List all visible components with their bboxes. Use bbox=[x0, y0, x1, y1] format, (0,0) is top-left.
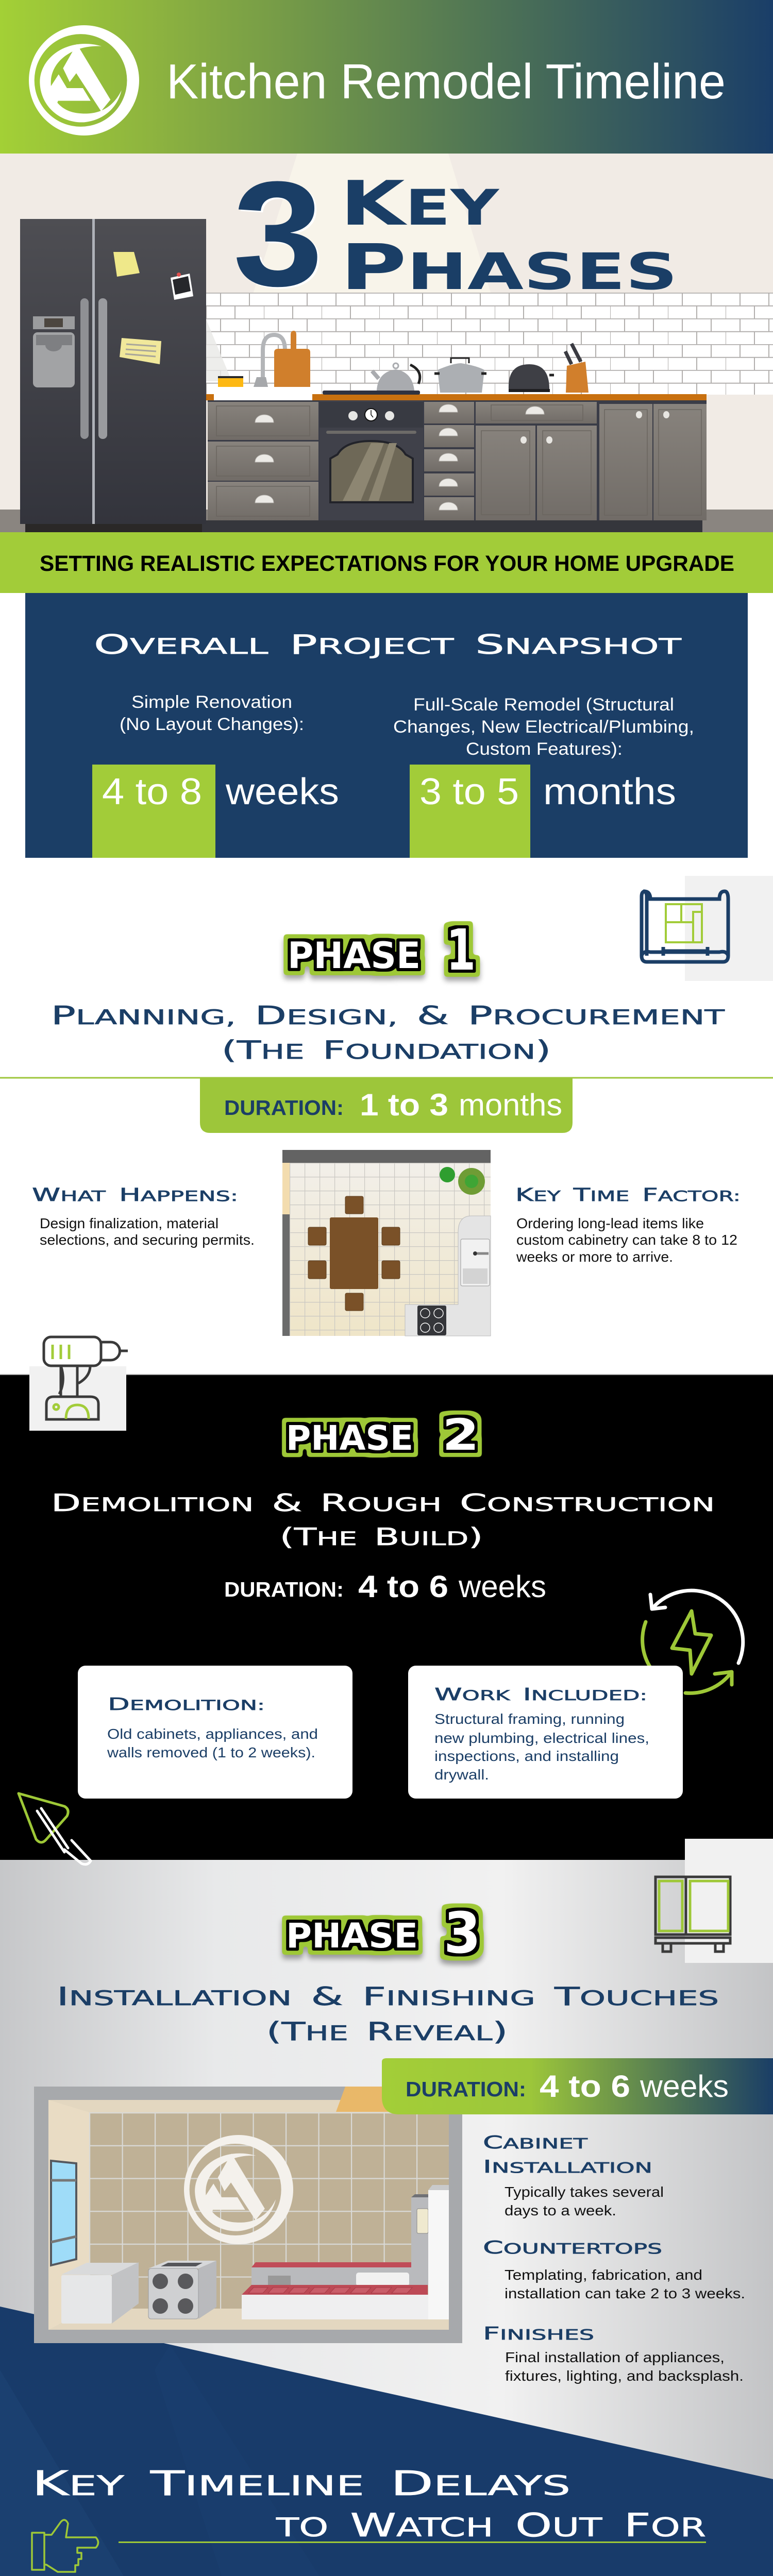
heading: installation: INSTALLATION & F INISHING T OUCHES bbox=[57, 1982, 719, 2011]
icon: cabinets bbox=[208, 400, 707, 520]
text: full-scale remodel bbox=[393, 695, 694, 759]
icon: A-1 logo bbox=[29, 25, 139, 135]
callout: phase 1 duration: months bbox=[459, 1088, 562, 1122]
badge: phase 1: PHASE bbox=[288, 935, 421, 977]
illustration: kitchen floor plan bbox=[282, 1150, 491, 1336]
text: full-scale remodel: Full-Scale Remodel (Structural bbox=[413, 695, 674, 715]
heading: planning bbox=[51, 1001, 726, 1065]
panel: phase 3 background bbox=[0, 1860, 773, 2483]
text: cabinet installation bbox=[483, 2132, 664, 2218]
icon: blueprint bbox=[642, 891, 728, 962]
heading: demolition: (T HE B UILD ) bbox=[280, 1523, 483, 1551]
text: key time factor bbox=[515, 1185, 741, 1265]
text: countertops bbox=[483, 2238, 745, 2301]
heading: 3 Key Phases: P HASES bbox=[340, 231, 678, 304]
text: cabinet installation: C ABINET bbox=[483, 2132, 588, 2153]
heading: installation: (T HE R EVEAL ) bbox=[266, 2017, 508, 2046]
text: key time factor: Ordering long-lead items like bbox=[516, 1215, 704, 1231]
heading: planning: (T HE F OUNDATION ) bbox=[222, 1036, 551, 1065]
text: countertops: Templating, fabrication, and bbox=[505, 2267, 702, 2283]
badge: phase 3: 3 bbox=[444, 1900, 481, 1966]
callout: phase 2 duration: weeks bbox=[458, 1569, 546, 1604]
callout: phase 1 duration: DURATION: bbox=[224, 1096, 344, 1120]
heading: demolition: D EMOLITION & R OUGH C ONSTRUCTION bbox=[51, 1489, 715, 1517]
icon: drill bbox=[44, 1337, 128, 1419]
card: work included: inspections, and installing bbox=[434, 1748, 619, 1764]
text: finishes: Final installation of appliances, bbox=[505, 2349, 725, 2365]
icon: logo watermark bbox=[184, 2135, 293, 2244]
stat: 4 to 8 weeks: weeks bbox=[225, 771, 339, 812]
heading: key timeline delays bbox=[32, 2464, 706, 2544]
callout: phase 3 duration: weeks bbox=[640, 2069, 729, 2104]
heading: snapshot: O VERALL P ROJECT S NAPSHOT bbox=[94, 630, 682, 660]
badge: phase 3 bbox=[286, 1900, 481, 1966]
card: demolition: Old cabinets, appliances, and bbox=[107, 1726, 318, 1742]
panel: hero kitchen illustration bbox=[0, 150, 773, 532]
heading: demolition bbox=[51, 1489, 715, 1551]
card: demolition: D EMOLITION: bbox=[108, 1694, 265, 1714]
illustration: finished kitchen room bbox=[34, 2087, 462, 2343]
icon: pointing hand bbox=[32, 2520, 98, 2572]
callout: phase 3 duration: 4 to 6 bbox=[540, 2069, 630, 2104]
stat: 3 to 5 months: months bbox=[543, 771, 676, 812]
card: demolition bbox=[78, 1666, 352, 1799]
panel: navy delays background bbox=[0, 2307, 773, 2576]
stat: 4 to 8 weeks: 4 to 8 bbox=[102, 771, 202, 812]
callout: phase 2 duration: DURATION: bbox=[224, 1578, 344, 1601]
text: what happens: selections, and securing permits. bbox=[40, 1232, 255, 1248]
stat: 4 to 8 weeks bbox=[92, 765, 339, 858]
text: key time factor: custom cabinetry can take 8 to 12 bbox=[516, 1232, 737, 1248]
card: work included: drywall. bbox=[434, 1767, 489, 1783]
text: finishes: F INISHES bbox=[483, 2324, 594, 2344]
panel: phase 3 content bbox=[57, 1877, 730, 2046]
callout: phase 1 duration: 1 to 3 bbox=[360, 1088, 448, 1122]
text: simple renovation: Simple Renovation bbox=[131, 692, 292, 712]
text: key time factor: K EY T IME F ACTOR: bbox=[515, 1185, 741, 1206]
text: countertops: installation can take 2 to 3 weeks. bbox=[505, 2285, 745, 2301]
panel: key timeline delays bbox=[32, 2464, 771, 2576]
panel: phase 2 bbox=[0, 1337, 773, 1860]
text: finishes: fixtures, lighting, and backsplash. bbox=[505, 2368, 744, 2384]
card: work included: new plumbing, electrical lines, bbox=[434, 1730, 649, 1746]
callout: phase 3 duration bbox=[382, 2058, 773, 2114]
callout: phase 3 duration: DURATION: bbox=[406, 2077, 526, 2101]
badge: phase 3: PHASE bbox=[286, 1916, 418, 1956]
badge: phase 2 bbox=[286, 1410, 479, 1460]
icon: lightning cycle bbox=[643, 1590, 743, 1693]
icon: sink, faucet, board and sponge bbox=[206, 331, 707, 400]
stat: 3 to 5 months: 3 to 5 bbox=[419, 771, 519, 812]
callout: phase 2 duration bbox=[224, 1569, 546, 1604]
heading: key timeline delays: TO W ATCH O UT F OR bbox=[276, 2506, 706, 2544]
banner: tagline bbox=[0, 532, 773, 593]
panel: header banner bbox=[0, 0, 773, 154]
text: simple renovation bbox=[120, 692, 304, 734]
text: what happens bbox=[32, 1185, 255, 1248]
text: full-scale remodel: Custom Features): bbox=[466, 739, 623, 759]
icon: stovetop kettle pot toaster and knives bbox=[323, 344, 589, 395]
icon: trowel bbox=[19, 1793, 91, 1865]
text: cabinet installation: days to a week. bbox=[505, 2202, 616, 2218]
banner: tagline: SETTING REALISTIC EXPECTATIONS FOR YOUR HOME UPGRADE bbox=[40, 551, 734, 576]
badge: phase 1: 1 bbox=[446, 917, 476, 983]
text: finishes bbox=[483, 2324, 744, 2384]
badge: phase 1 bbox=[288, 917, 476, 983]
badge: phase 2: PHASE bbox=[286, 1418, 413, 1458]
heading: planning: P LANNING, D ESIGN, & P ROCUREMENT bbox=[51, 1001, 726, 1030]
text: key time factor: weeks or more to arrive. bbox=[516, 1249, 673, 1265]
icon: oven bbox=[320, 400, 423, 520]
heading: 3 Key Phases: 3 bbox=[233, 150, 323, 317]
text: full-scale remodel: Changes, New Electrical/Plumbing, bbox=[393, 717, 694, 737]
text: countertops: C OUNTERTOPS bbox=[483, 2238, 662, 2258]
icon: refrigerator bbox=[20, 219, 206, 524]
callout: phase 1 duration bbox=[200, 1078, 573, 1133]
card: work included: W ORK I NCLUDED: bbox=[434, 1684, 647, 1704]
stat: 3 to 5 months bbox=[410, 765, 676, 858]
heading: 3 Key Phases: K EY bbox=[340, 168, 499, 240]
text: cabinet installation: Typically takes several bbox=[505, 2184, 664, 2200]
card: work included bbox=[408, 1666, 683, 1799]
heading: key timeline delays: K EY T IMELINE D ELAYS bbox=[32, 2464, 570, 2503]
heading: installation bbox=[57, 1982, 719, 2046]
text: simple renovation: (No Layout Changes): bbox=[120, 715, 304, 734]
title: Kitchen Remodel Timeline bbox=[166, 54, 726, 109]
card: demolition: walls removed (1 to 2 weeks). bbox=[107, 1744, 315, 1760]
text: what happens: Design finalization, material bbox=[40, 1215, 219, 1231]
badge: phase 2: 2 bbox=[442, 1410, 479, 1460]
heading: 3 Key Phases bbox=[233, 150, 678, 317]
panel: phase 1 bbox=[0, 876, 773, 1336]
card: work included: Structural framing, running bbox=[434, 1711, 625, 1727]
callout: phase 2 duration: 4 to 6 bbox=[358, 1569, 448, 1604]
text: what happens: W HAT H APPENS: bbox=[32, 1185, 238, 1206]
panel: overall project snapshot bbox=[25, 593, 748, 858]
text: cabinet installation: I NSTALLATION bbox=[483, 2157, 652, 2177]
icon: cabinet bbox=[656, 1877, 730, 1952]
